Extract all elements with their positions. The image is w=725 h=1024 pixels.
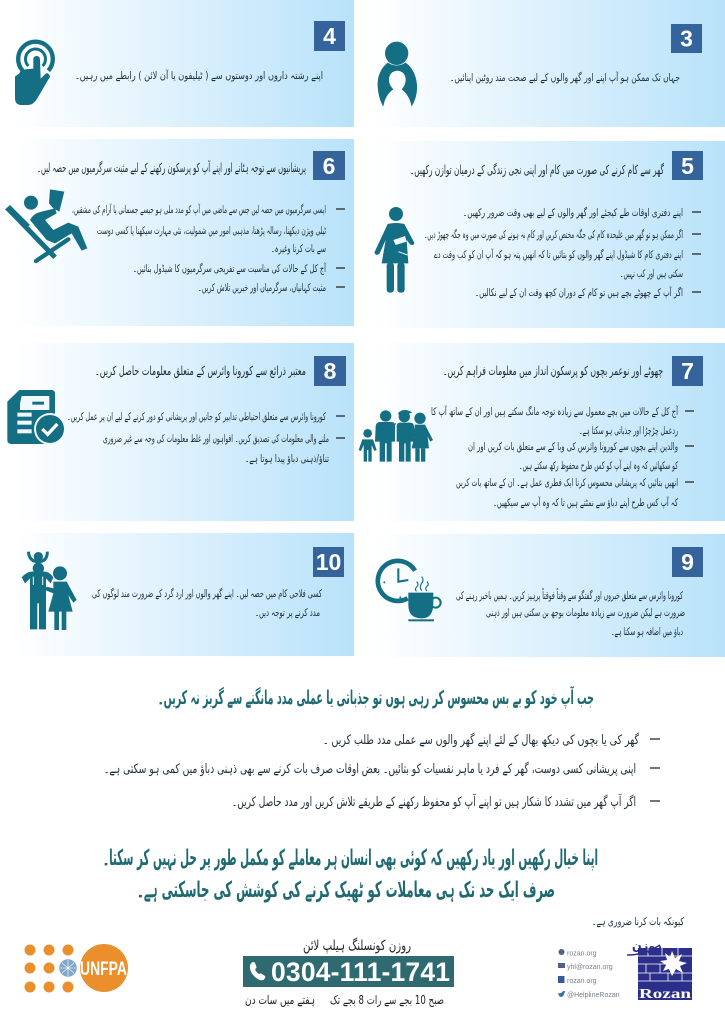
bullet list — [424, 206, 701, 299]
helpline hours: ہفتے میں سات دن — [245, 993, 315, 1008]
UNFPA logo: UNFPA — [80, 959, 127, 980]
number 5: 5 — [681, 153, 694, 179]
panel 3: healthy routine — [359, 0, 725, 127]
helpline number: 0304-111-1741 — [271, 957, 450, 987]
text — [92, 587, 322, 619]
bullet list: ٹیلی ویژن دیکھنا، رسالہ پڑھنا، مذہبی امور میں شمولیت، نئی مہارت سیکھنا یا کسی دوست — [97, 225, 326, 237]
bullet list: کورونا وائرس سے متعلق احتیاطی تدابیر کو جانیں اور پریشانی کو دور کرنے کے لیے ان پر عمل کریں۔ — [67, 411, 326, 423]
helpline heading: روزن کونسلنگ ہیلپ لائن — [303, 937, 411, 954]
bullet list: آج کل کے حالات کی مناسبت سے تفریحی سرگرمیوں کا شیڈول بنائیں۔ — [133, 262, 327, 275]
heading: معتبر ذرائع سے کورونا وائرس کے متعلق معلومات حاصل کریں۔ — [95, 363, 306, 379]
closing message — [103, 846, 598, 903]
number 3 — [671, 24, 702, 53]
Rozan logo: روزن — [632, 939, 662, 954]
icon: person with child — [378, 42, 417, 107]
number 7 — [672, 356, 703, 386]
icon: woman with book — [374, 207, 414, 293]
bullet list: ملنے والی معلومات کی تصدیق کریں۔ افواہوں اور غلط معلومات کی وجہ سے غیر ضروری — [103, 433, 329, 445]
bullet list: مثبت کہانیاں، سرگرمیاں اور خبریں تلاش کریں۔ — [198, 281, 326, 294]
panel 8: reliable information — [0, 343, 354, 521]
panel 9: limit news — [359, 534, 725, 657]
tagline: کیونکہ بات کرنا ضروری ہے۔ — [592, 916, 684, 928]
help bullet list — [104, 732, 660, 810]
number 9: 9 — [681, 549, 694, 575]
icon: person reading on lounger — [5, 189, 87, 261]
bullet list: تناؤ/ذہنی دباؤ پیدا ہوتا ہے۔ — [245, 453, 329, 465]
icon: family — [359, 410, 433, 462]
number 8: 8 — [324, 358, 337, 384]
heading: پریشانیوں سے توجہ ہٹانے اور اپنے آپ کو پرسکون رکھنے کے لیے مثبت سرگرمیوں میں حصہ لیں۔ — [37, 160, 306, 176]
icon: document with check — [7, 390, 66, 445]
contact list — [558, 949, 620, 999]
icon: clock and coffee cup — [378, 561, 441, 621]
helpline hours: صبح 10 بجے سے رات 8 بجے تک — [330, 993, 444, 1008]
number 4 — [314, 21, 345, 51]
contact list: rozan.org — [567, 978, 597, 985]
number 10: 10 — [316, 549, 341, 575]
number 6: 6 — [323, 153, 335, 179]
Rozan logo: Rozan — [639, 987, 691, 1002]
icon: touching hand — [15, 42, 53, 105]
Rozan logo — [627, 939, 692, 1002]
panel 10: charity work — [0, 533, 354, 656]
text — [456, 588, 685, 638]
text: مدد کرنے پر توجہ دیں۔ — [255, 607, 320, 619]
text: کسی فلاحی کام میں حصہ لیں۔ اپنے گھر والوں اور ارد گرد کے ضرورت مند لوگوں کی — [92, 587, 322, 600]
panel 5: work-life balance — [359, 141, 725, 328]
number 9 — [672, 547, 703, 577]
number 3: 3 — [680, 26, 693, 52]
bullet list: سے بات کرنا وغیرہ۔ — [271, 243, 326, 255]
number 8 — [314, 356, 346, 386]
bullet list: ایسی سرگرمیوں میں حصہ لیں جس سے ماضی میں آپ کو مدد ملی ہو جیسے جسمانی یا آرام کی مشقیں، — [72, 203, 326, 216]
number 5 — [672, 151, 703, 180]
text: اپنے رشتہ داروں اور دوستوں سے ( ٹیلیفون یا آن لائن ) رابطے میں رہیں۔ — [75, 69, 323, 82]
bullet list — [67, 411, 345, 465]
panel 7: informing children — [359, 343, 725, 521]
panel 4: stay connected — [0, 0, 354, 127]
icon: parents with child on shoulders — [22, 552, 77, 630]
contact list: yhl@rozan.org — [567, 964, 613, 971]
helpline hours — [245, 993, 444, 1008]
number 7: 7 — [681, 358, 694, 384]
contact list: @HelplineRozan — [567, 992, 620, 999]
number 4: 4 — [323, 23, 336, 49]
contact list: rozan.org — [567, 950, 597, 958]
bullet list — [72, 203, 345, 294]
bullet list — [431, 405, 694, 509]
number 6 — [313, 151, 345, 180]
UNFPA logo — [24, 944, 128, 992]
panel 6: positive activities — [0, 139, 354, 326]
